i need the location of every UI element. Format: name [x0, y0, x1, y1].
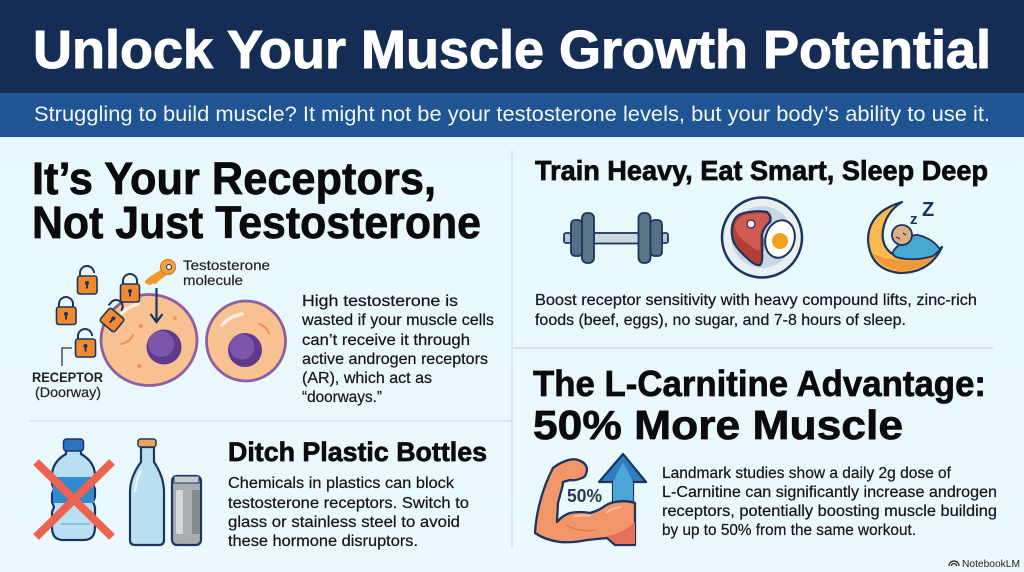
label: receptor doorway: [32, 348, 103, 400]
text: l-carnitine explanation: Landmark studies show a daily 2g dose of: [662, 465, 952, 482]
text: l-carnitine explanation: by up to 50% from the same workout.: [662, 522, 916, 539]
logo: NotebookLM: NotebookLM: [962, 558, 1020, 570]
illustration: muscle cells and receptors: [32, 257, 286, 400]
icon: small cell: [206, 301, 286, 381]
icon: baby sleeping on moon: [868, 202, 942, 273]
label: receptor doorway: RECEPTOR: [32, 370, 103, 385]
text: receptor explanation: can’t receive it through: [302, 332, 470, 349]
icon: plate with steak and egg: [722, 198, 802, 278]
icon: key: [147, 260, 176, 283]
text: plastics explanation: Chemicals in plastics can block: [228, 475, 454, 492]
zzz large: Z: [922, 199, 934, 221]
text: plastics explanation: [228, 475, 469, 550]
icon: arm: [535, 459, 635, 545]
text: l-carnitine explanation: L-Carnitine can significantly increase androgen: [662, 484, 997, 501]
heading: l-carnitine: 50% More Muscle: [533, 402, 903, 448]
text: receptor sensitivity: Boost receptor sensitivity with heavy compound lifts, zinc-rich: [535, 292, 977, 309]
icon: flexed arm with arrow: [535, 454, 646, 545]
heading: receptors: Not Just Testosterone: [32, 197, 481, 248]
heading: receptors: It’s Your Receptors,: [32, 153, 436, 204]
text: plastics explanation: glass or stainless steel to avoid: [228, 514, 460, 531]
heading: l-carnitine: The L-Carnitine Advantage:: [533, 363, 986, 404]
label: testosterone molecule: [183, 257, 270, 288]
icon: dumbbell: [564, 213, 668, 263]
subtitle band: [0, 93, 1024, 137]
text: receptor sensitivity: foods (beef, eggs), no sugar, and 7-8 hours of sleep.: [535, 312, 906, 329]
text: l-carnitine explanation: receptors, potentially boosting muscle building: [662, 503, 997, 520]
icon: crossed plastic bottle: [36, 439, 112, 540]
illustration: bottles: [36, 439, 201, 545]
icon: padlocks: [56, 266, 140, 357]
arrow: key into cell: [150, 288, 162, 322]
arrow: up: [599, 454, 646, 503]
icon: glass bottle: [130, 439, 164, 545]
title: Unlock Your Muscle Growth Potential: [33, 20, 991, 80]
text: receptor explanation: active androgen receptors: [302, 351, 488, 368]
heading: ditch plastic bottles: Ditch Plastic Bottles: [228, 437, 487, 467]
label: receptor doorway: (Doorway): [35, 385, 101, 400]
heading: receptors: [32, 153, 481, 248]
text: receptor explanation: [301, 293, 494, 406]
text: receptor explanation: “doorways.”: [302, 389, 382, 406]
label: testosterone molecule: molecule: [183, 272, 243, 288]
text: plastics explanation: testosterone receptors. Switch to: [228, 495, 469, 512]
icon: large cell: [101, 294, 197, 386]
text: receptor sensitivity: [535, 292, 977, 329]
heading: train heavy: Train Heavy, Eat Smart, Sleep Deep: [535, 155, 988, 186]
text: receptor explanation: (AR), which act as: [302, 370, 432, 387]
text: receptor explanation: High testosterone is: [302, 293, 458, 310]
text: l-carnitine explanation: [662, 465, 997, 539]
header band: [0, 0, 1024, 93]
label: 50%: 50%: [567, 486, 602, 506]
zzz: z: [910, 211, 918, 228]
icon: steel can: [172, 476, 201, 545]
label: testosterone molecule: Testosterone: [183, 257, 270, 273]
heading: l-carnitine: [533, 363, 986, 448]
text: receptor explanation: wasted if your muscle cells: [301, 312, 494, 329]
subtitle band: Struggling to build muscle? It might not be your testosterone levels, but your body’s ability to use it.: [34, 103, 990, 126]
text: plastics explanation: these hormone disruptors.: [228, 533, 418, 550]
